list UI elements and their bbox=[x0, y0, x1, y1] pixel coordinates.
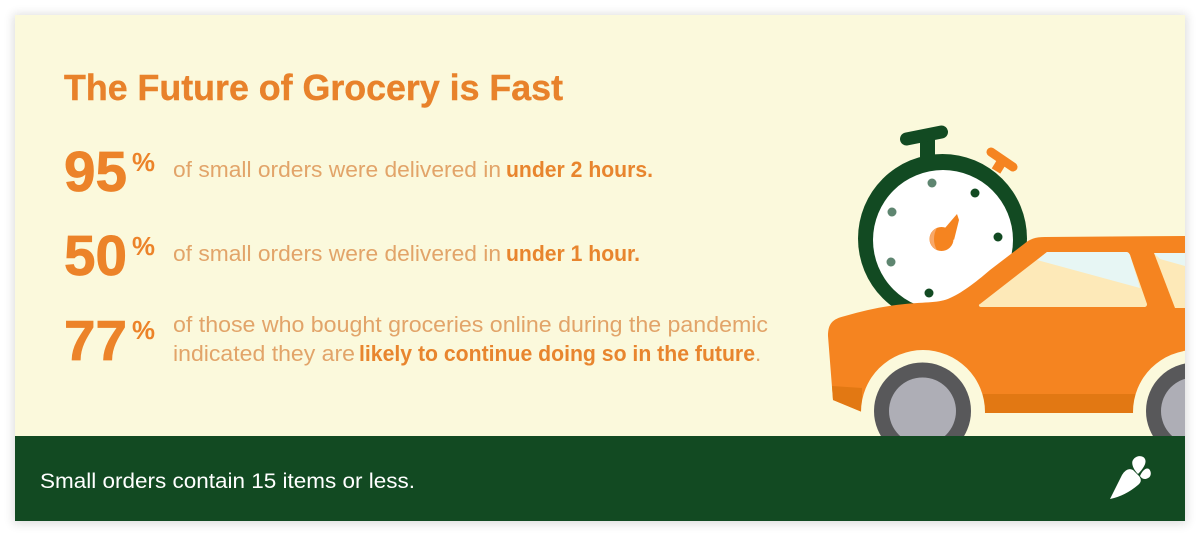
panel: green footer band bbox=[15, 436, 1185, 521]
statistic: 95 percent: 95 bbox=[64, 140, 127, 204]
statistic: 77 percent: indicated they are bbox=[173, 341, 355, 366]
statistic: 50 percent: % bbox=[132, 231, 155, 261]
statistic: 50 percent: under 1 hour. bbox=[506, 241, 640, 266]
panel: cream background bbox=[15, 15, 1185, 436]
statistic: 95 percent bbox=[64, 140, 653, 204]
icon: carrot logo bbox=[1110, 456, 1151, 499]
statistic: 95 percent: of small orders were delivered in bbox=[173, 157, 501, 182]
statistic: 50 percent: 50 bbox=[64, 224, 127, 288]
statistic: 77 percent: % bbox=[132, 315, 155, 345]
statistic: 77 percent bbox=[64, 309, 768, 373]
statistic: 50 percent: of small orders were delivered in bbox=[173, 241, 501, 266]
illustration: orange car bbox=[828, 236, 1185, 436]
footnote: Small orders contain 15 items or less. bbox=[40, 470, 415, 493]
statistic: 77 percent: . bbox=[755, 341, 761, 366]
statistic: 95 percent: under 2 hours. bbox=[506, 157, 653, 182]
heading: The Future of Grocery is Fast bbox=[64, 67, 563, 108]
statistic: 77 percent: likely to continue doing so in the future bbox=[359, 341, 755, 366]
statistic: 50 percent bbox=[64, 224, 640, 288]
statistic: 95 percent: % bbox=[132, 147, 155, 177]
statistic: 77 percent: of those who bought groceries online during the pandemic bbox=[173, 312, 768, 337]
icon: stopwatch bbox=[858, 132, 1027, 323]
statistic: 77 percent: 77 bbox=[64, 309, 127, 373]
